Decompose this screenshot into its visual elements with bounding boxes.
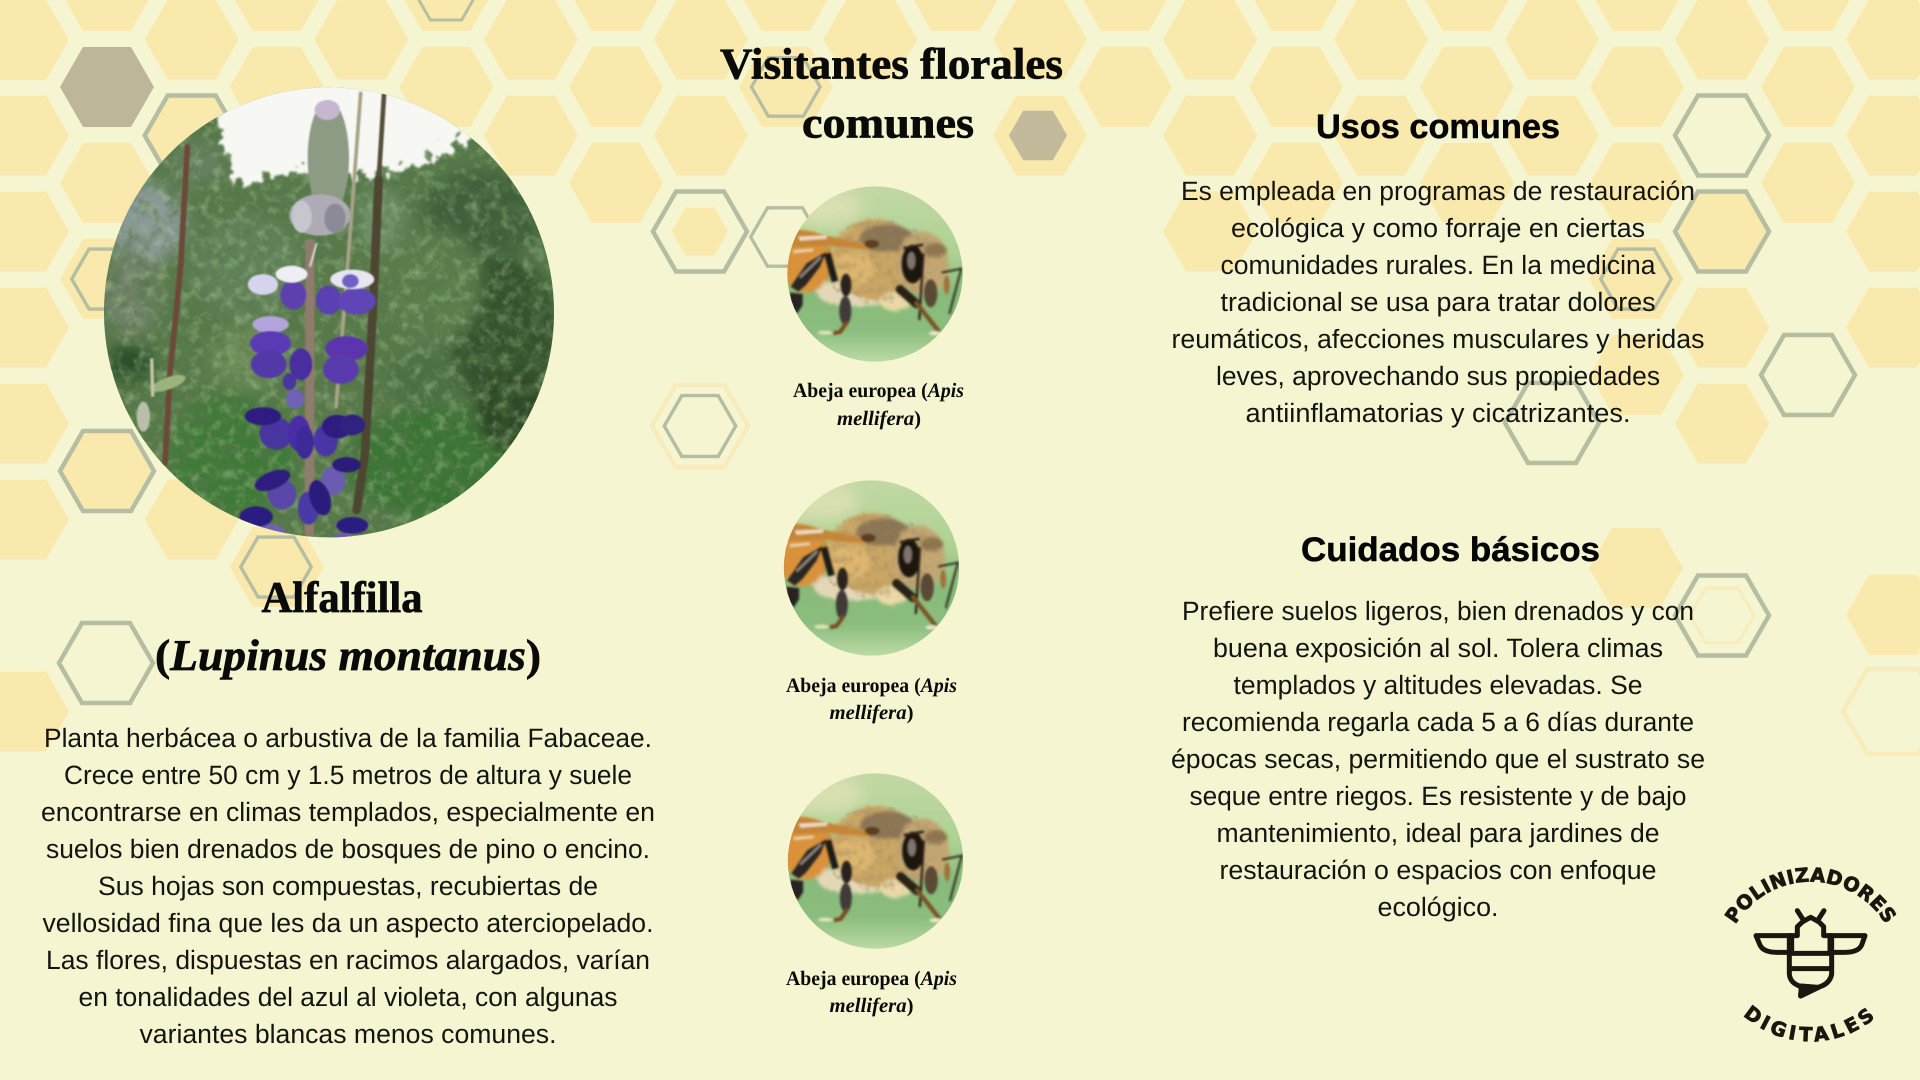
care text: épocas secas, permitiendo que el sustrato se	[1171, 744, 1705, 774]
bee caption 2: mellifera)	[830, 702, 914, 724]
logo text bottom: DIGITALES	[1744, 1004, 1874, 1042]
plant description text: variantes blancas menos comunes.	[140, 1019, 556, 1049]
care text: ecológico.	[1378, 892, 1498, 922]
care text: restauración o espacios con enfoque	[1220, 855, 1656, 885]
uses text: reumáticos, afecciones musculares y heridas	[1172, 324, 1704, 354]
plant name heading: Alfalfilla	[262, 573, 422, 622]
visitor card 1: bee	[781, 186, 964, 430]
plant description text: Las flores, dispuestas en racimos alargados, varían	[46, 945, 650, 975]
uses text: antiinflamatorias y cicatrizantes.	[1246, 398, 1630, 428]
uses text	[1172, 176, 1704, 428]
bee photo 1	[781, 186, 963, 362]
sky	[210, 87, 472, 190]
heading: Cuidados básicos: Cuidados básicos	[1301, 531, 1600, 569]
care text: Prefiere suelos ligeros, bien drenados y con	[1182, 596, 1694, 626]
icon: bee	[1756, 911, 1865, 996]
care text: seque entre riegos. Es resistente y de bajo	[1190, 781, 1686, 811]
plant description text: vellosidad fina que les da un aspecto aterciopelado.	[42, 908, 654, 938]
bee caption 3: Abeja europea (Apis	[786, 968, 957, 990]
care text: recomienda regarla cada 5 a 6 días durante	[1182, 707, 1694, 737]
uses text: Es empleada en programas de restauración	[1181, 176, 1695, 206]
logo text top: POLINIZADORES	[1724, 867, 1896, 924]
tree trunks	[165, 93, 384, 510]
plant description text: en tonalidades del azul al violeta, con algunas	[78, 982, 618, 1012]
care text: templados y altitudes elevadas. Se	[1234, 670, 1642, 700]
plant description text: Planta herbácea o arbustiva de la familia Fabaceae.	[44, 723, 652, 753]
title: Visitantes florales comunes: comunes	[802, 98, 974, 148]
uses text: ecológica y como forraje en ciertas	[1231, 213, 1645, 243]
title: Visitantes florales comunes	[720, 40, 1063, 148]
uses text: tradicional se usa para tratar dolores	[1220, 287, 1656, 317]
bee photo 3	[781, 773, 963, 949]
visitor card 3: bee	[781, 773, 963, 1017]
bee caption 2: Abeja europea (Apis	[786, 675, 957, 697]
photo: Lupinus montanus in forest	[104, 87, 554, 538]
uses text: comunidades rurales. En la medicina	[1220, 250, 1656, 280]
flower spike	[137, 100, 376, 549]
visitor card 2: bee	[777, 480, 959, 724]
title: Visitantes florales comunes: Visitantes florales	[720, 40, 1063, 88]
heading: Usos comunes: Usos comunes	[1316, 108, 1560, 146]
accent hexagons	[59, 0, 1920, 754]
plant description text: suelos bien drenados de bosques de pino o encino.	[46, 834, 650, 864]
bee caption 1	[793, 380, 964, 430]
bee caption 3: mellifera)	[830, 995, 914, 1017]
care text	[1171, 596, 1705, 922]
honeycomb background pattern	[0, 0, 1920, 752]
logo: Polinizadores Digitales	[1724, 867, 1896, 1042]
plant name heading: (Lupinus montanus )	[155, 631, 541, 680]
plant name heading	[155, 573, 541, 680]
plant description text: encontrarse en climas templados, especialmente en	[41, 797, 655, 827]
plant description text: Sus hojas son compuestas, recubiertas de	[98, 871, 598, 901]
care text: mantenimiento, ideal para jardines de	[1216, 818, 1660, 848]
plant description text: Crece entre 50 cm y 1.5 metros de altura y suele	[64, 760, 632, 790]
bee caption 1: Abeja europea (Apis	[793, 380, 964, 402]
care text: buena exposición al sol. Tolera climas	[1213, 633, 1663, 663]
bee photo 2	[777, 480, 959, 656]
bee caption 2	[786, 675, 957, 724]
bee caption 1: mellifera)	[837, 408, 921, 430]
bee caption 3	[786, 968, 957, 1017]
uses text: leves, aprovechando sus propiedades	[1216, 361, 1660, 391]
plant description text	[41, 723, 655, 1049]
